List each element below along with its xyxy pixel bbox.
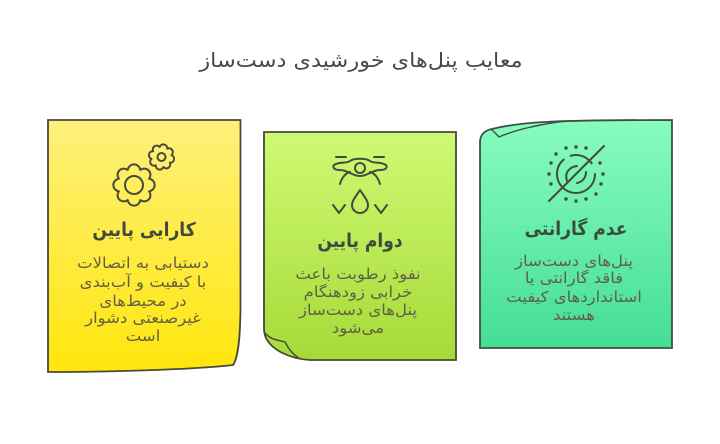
heading: low efficiency: کارایی پایین <box>92 219 196 241</box>
icon: gears <box>113 142 177 206</box>
body text: low efficiency: در محیط‌های <box>99 292 187 311</box>
body text: low durability: خرابی زودهنگام <box>304 283 412 302</box>
title: معایب پنل‌های خورشیدی دست‌ساز <box>198 49 523 73</box>
yellow card shape <box>48 120 240 372</box>
body text: low durability: پنل‌های دست‌ساز <box>298 301 417 320</box>
heading: no warranty: عدم گارانتی <box>525 217 627 240</box>
body text: low efficiency: با کیفیت و آب‌بندی <box>80 273 206 292</box>
page curl <box>490 121 566 137</box>
panel: low efficiency <box>48 120 240 372</box>
page fold <box>265 333 300 359</box>
body text: no warranty: هستند <box>553 306 595 324</box>
lime card shape <box>264 132 456 360</box>
body text: low durability: نفوذ رطوبت باعث <box>295 265 421 284</box>
body text: low efficiency: است <box>126 327 160 345</box>
icon dots <box>547 145 605 203</box>
panel: no warranty <box>480 120 672 348</box>
body text: low durability <box>295 265 421 338</box>
body text: no warranty: استانداردهای کیفیت <box>506 288 642 307</box>
body text: no warranty <box>506 252 642 324</box>
body text: no warranty: پنل‌های دست‌ساز <box>514 252 633 271</box>
panel: low durability <box>264 132 456 360</box>
body text: low efficiency: دستیابی به اتصالات <box>77 254 209 272</box>
body text: low durability: می‌شود <box>332 319 384 338</box>
body text: low efficiency <box>77 254 209 345</box>
teal card shape <box>480 120 672 348</box>
body text: no warranty: فاقد گارانتی یا <box>525 269 623 288</box>
icon: moisture <box>333 157 387 213</box>
heading: low durability: دوام پایین <box>317 230 403 252</box>
icon: crossed seal <box>549 146 604 201</box>
body text: low efficiency: غیرصنعتی دشوار <box>84 309 201 328</box>
